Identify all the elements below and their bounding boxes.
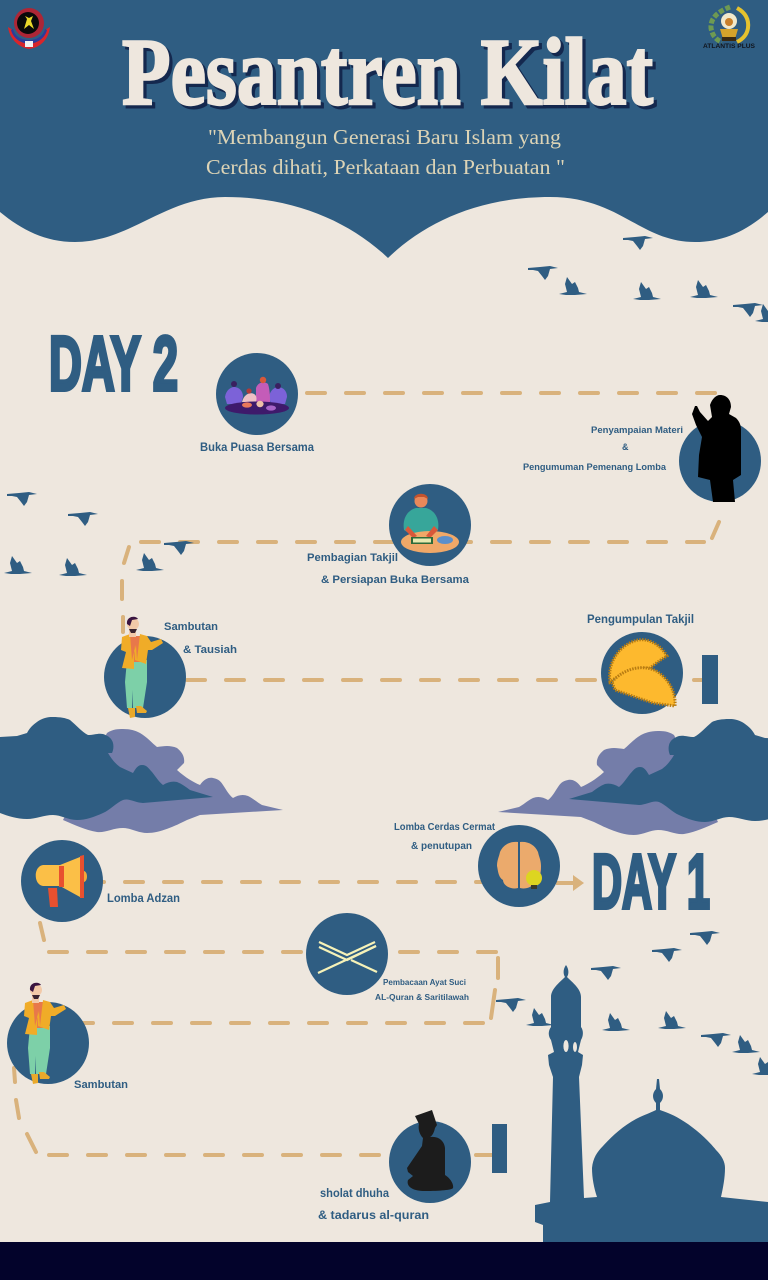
icon: praying figure — [407, 1110, 453, 1191]
bottom bar — [0, 1242, 768, 1280]
label: Pembacaan Ayat Suci — [375, 978, 469, 1002]
birds: top right flock — [528, 236, 768, 322]
logo: left organisation emblem — [8, 8, 50, 49]
icon: cook preparing food — [401, 494, 459, 553]
icon: open Quran — [318, 942, 377, 973]
icon: fried pastries — [610, 640, 675, 706]
label: Penyampaian Materi dan Pengumuman — [523, 425, 683, 472]
label: Sholat Dhuha dan Tadarus: & tadarus al-quran — [318, 1208, 429, 1222]
clouds: right — [498, 719, 768, 835]
label: Pengumpulan Takjil: Pengumpulan Takjil — [587, 612, 694, 626]
node: Penyampaian Materi — [679, 395, 761, 502]
icon: presenter man — [24, 983, 66, 1084]
tagline: Cerdas dihati, Perkataan dan Perbuatan " — [206, 155, 565, 179]
arrow to Day 1 — [556, 875, 584, 891]
node: Pembacaan Ayat Suci — [306, 913, 388, 995]
tagline — [206, 125, 565, 179]
node: Sholat Dhuha — [389, 1110, 471, 1203]
node: Pembagian Takjil — [389, 484, 471, 566]
label: Pembagian Takjil — [307, 552, 470, 586]
node: Sambutan dan Tausiah — [104, 617, 186, 718]
mosque silhouette — [535, 965, 768, 1243]
logo: right Atlantis Plus emblem: ATLANTIS PLUS — [703, 44, 755, 50]
label: Sambutan dan Tausiah: Sambutan — [164, 621, 218, 633]
label: Penyampaian Materi dan Pengumuman: Penyampaian Materi — [591, 425, 683, 435]
label: Buka Puasa Bersama: Buka Puasa Bersama — [200, 440, 314, 454]
label: Penyampaian Materi dan Pengumuman: & — [622, 442, 629, 452]
label: Sholat Dhuha dan Tadarus — [318, 1186, 429, 1222]
icon: shared meal — [225, 377, 289, 414]
label: Pembagian Takjil: & Persiapan Buka Bersama — [321, 574, 470, 586]
icon: presenter man — [121, 617, 163, 718]
marker bar: Day 1 start — [492, 1124, 507, 1173]
marker bar: Day 2 start — [702, 655, 718, 704]
logo: right Atlantis Plus emblem — [703, 7, 755, 50]
node: Lomba Adzan — [21, 840, 103, 922]
label: Lomba Cerdas Cermat — [394, 822, 496, 852]
icon: speaker silhouette — [692, 395, 741, 502]
heading: Day 2: DAY 2 — [49, 321, 178, 407]
mosque minaret windows — [563, 1040, 577, 1052]
label: Pembagian Takjil: Pembagian Takjil — [307, 552, 398, 564]
node: Sambutan — [7, 983, 89, 1084]
birds: lower right flock — [496, 931, 768, 1075]
node: Pengumpulan Takjil — [601, 632, 683, 714]
label: Lomba Cerdas Cermat: & penutupan — [411, 841, 472, 852]
dashed route path — [14, 393, 719, 1155]
label: Penyampaian Materi dan Pengumuman: Pengumuman Pemenang Lomba — [523, 462, 667, 472]
label: Lomba Cerdas Cermat: Lomba Cerdas Cermat — [394, 822, 496, 833]
title: Pesantren Kilat — [125, 22, 656, 128]
clouds: left — [0, 717, 283, 833]
label: Sholat Dhuha dan Tadarus: sholat dhuha — [320, 1186, 389, 1200]
label: Sambutan dan Tausiah: & Tausiah — [183, 644, 237, 656]
label: Lomba Adzan: Lomba Adzan — [107, 891, 180, 905]
birds: left flock — [4, 492, 194, 576]
node: Buka Puasa Bersama — [216, 353, 298, 435]
label: Sambutan: Sambutan — [74, 1079, 128, 1091]
label: Pembacaan Ayat Suci: Pembacaan Ayat Suci — [383, 978, 466, 987]
node: Lomba Cerdas Cermat — [478, 825, 560, 907]
icon: megaphone — [36, 855, 87, 907]
label: Sambutan dan Tausiah — [164, 621, 237, 656]
tagline: "Membangun Generasi Baru Islam yang — [208, 125, 562, 149]
header wave banner — [0, 0, 768, 258]
label: Pembacaan Ayat Suci: AL-Quran & Saritilawah — [375, 993, 469, 1002]
icon: brain with light bulb — [497, 842, 542, 889]
title: Pesantren Kilat — [122, 19, 653, 125]
